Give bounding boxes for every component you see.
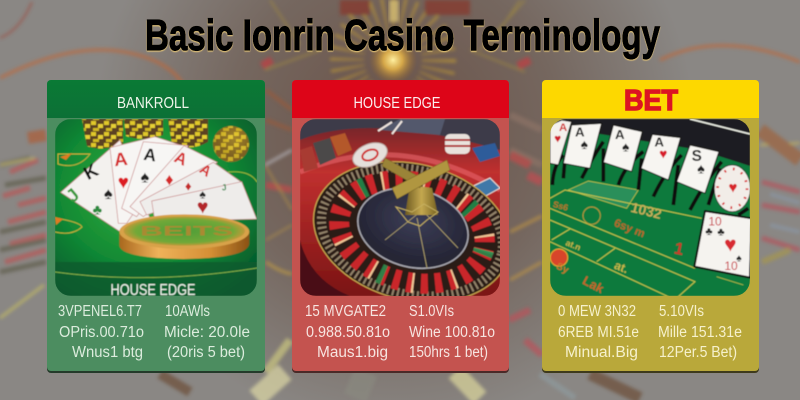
playing card fan: ♠ bbox=[199, 187, 206, 201]
terms text: house edge: 15 MVGATE2 bbox=[305, 303, 386, 320]
upright cards on black stands: 10 bbox=[724, 259, 738, 273]
terms text: bet bbox=[558, 303, 742, 361]
rail bbox=[550, 119, 750, 166]
terms text: bankroll: (20ris 5 bet) bbox=[167, 344, 245, 361]
upright cards on black stands: A bbox=[615, 127, 625, 142]
playing card fan: K bbox=[80, 159, 102, 184]
playing card fan: A bbox=[142, 144, 158, 166]
casino chip bbox=[714, 165, 750, 212]
wheel bbox=[312, 160, 500, 296]
playing card fan: ♠ bbox=[141, 167, 150, 186]
playing card fan: J bbox=[62, 184, 83, 207]
panel: bet bbox=[542, 80, 759, 373]
table layout lines: 6sy m bbox=[612, 217, 646, 240]
brass turret bbox=[382, 158, 450, 226]
playing card fan: A bbox=[171, 147, 190, 170]
playing card fan: ♥ bbox=[118, 172, 129, 193]
playing card fan: A bbox=[113, 148, 129, 170]
playing card fan: A bbox=[196, 161, 214, 181]
playing card fan: ♣ bbox=[93, 202, 103, 218]
panel: bankroll bbox=[47, 80, 265, 373]
terms text: house edge: 0.988.50.81o bbox=[306, 324, 390, 341]
upright cards on black stands: ♥ bbox=[724, 233, 737, 257]
terms text: house edge: Wine 100.81o bbox=[409, 324, 495, 341]
playing card fan: ♥ bbox=[197, 197, 209, 219]
upright cards on black stands: ♠ bbox=[736, 253, 742, 265]
upright cards on black stands: ♠ bbox=[697, 161, 705, 177]
playing card fan: ♦ bbox=[185, 179, 192, 194]
playing card fan: J bbox=[221, 182, 227, 193]
gap left bbox=[265, 150, 292, 165]
table layout lines: Lak bbox=[580, 274, 607, 297]
playing card fan: ♦ bbox=[165, 170, 174, 189]
illustration: roulette wheel bbox=[300, 119, 500, 296]
terms text: bankroll bbox=[58, 303, 250, 361]
terms text: house edge: 150hrs 1 bet) bbox=[409, 344, 488, 361]
gold coin: BEITS bbox=[140, 223, 233, 239]
table layout lines: at.n bbox=[564, 238, 582, 253]
terms text: bankroll: Wnus1 btg bbox=[72, 344, 143, 361]
playing card fan bbox=[61, 137, 257, 232]
terms text: bet: 12Per.5 Bet) bbox=[659, 344, 737, 361]
table chips and betting plaques bbox=[300, 119, 500, 198]
upright cards on black stands: ♣ bbox=[705, 226, 713, 238]
table layout lines bbox=[550, 181, 743, 297]
upright cards on black stands: S bbox=[692, 148, 702, 165]
upright cards on black stands: A bbox=[575, 124, 585, 139]
panel header: house edge: HOUSE EDGE bbox=[354, 95, 440, 112]
terms text: bet: 5.10VIs bbox=[659, 303, 704, 320]
terms text: bet: 6REB MI.51e bbox=[558, 324, 639, 341]
panel header: bet: BET bbox=[624, 85, 678, 117]
illustration: betting table with cards bbox=[550, 119, 752, 297]
table layout lines: 1032 bbox=[629, 199, 664, 222]
image caption: HOUSE EDGE bbox=[110, 282, 196, 299]
gold coin bbox=[119, 214, 249, 259]
playing card fan: ♠ bbox=[104, 184, 113, 203]
chip stacks bbox=[82, 119, 249, 162]
terms text: bankroll: 3VPENEL6.T7 bbox=[58, 303, 142, 320]
terms text: house edge bbox=[305, 303, 495, 361]
upright cards on black stands: ♥ bbox=[659, 145, 667, 161]
gap right bbox=[510, 115, 542, 165]
panel header: bet bbox=[542, 80, 759, 118]
table layout lines: 1 bbox=[672, 239, 686, 259]
terms text: bankroll: 10AWls bbox=[165, 303, 210, 320]
upright cards on black stands: A bbox=[559, 122, 567, 134]
panel header: house edge bbox=[292, 80, 509, 118]
upright cards on black stands: A bbox=[654, 134, 664, 149]
bottom streaks bbox=[256, 372, 285, 398]
upright cards on black stands: ♥ bbox=[554, 131, 561, 145]
upright cards on black stands: ♥ bbox=[728, 179, 738, 196]
table layout lines: Ss6 bbox=[552, 199, 570, 213]
terms text: bet: 0 MEW 3N32 bbox=[558, 303, 636, 320]
terms text: bet: Minual.Big bbox=[565, 344, 638, 361]
table layout lines: at. bbox=[612, 258, 630, 276]
upright cards on black stands: ♠ bbox=[622, 139, 630, 155]
white chip bbox=[352, 142, 388, 169]
panel header: bankroll: BANKROLL bbox=[117, 95, 189, 112]
table layout lines: Sy bbox=[554, 261, 571, 276]
upright cards on black stands: ♣ bbox=[717, 227, 725, 239]
terms text: bankroll: Micle: 20.0le bbox=[164, 324, 250, 341]
panel: house edge bbox=[292, 80, 525, 373]
panel header: bankroll bbox=[47, 80, 265, 118]
terms text: bet: Mille 151.31e bbox=[658, 324, 742, 341]
upright cards on black stands: 10 bbox=[708, 215, 722, 229]
ten of hearts card bbox=[694, 211, 752, 278]
terms text: bankroll: OPris.00.71o bbox=[59, 324, 144, 341]
upright cards on black stands bbox=[550, 120, 752, 278]
terms text: house edge: S1.0VIs bbox=[409, 303, 454, 320]
terms text: house edge: Maus1.big bbox=[317, 344, 388, 361]
illustration: cards, chips and gold coin on green table bbox=[55, 119, 257, 299]
upright cards on black stands: ♠ bbox=[581, 136, 589, 152]
